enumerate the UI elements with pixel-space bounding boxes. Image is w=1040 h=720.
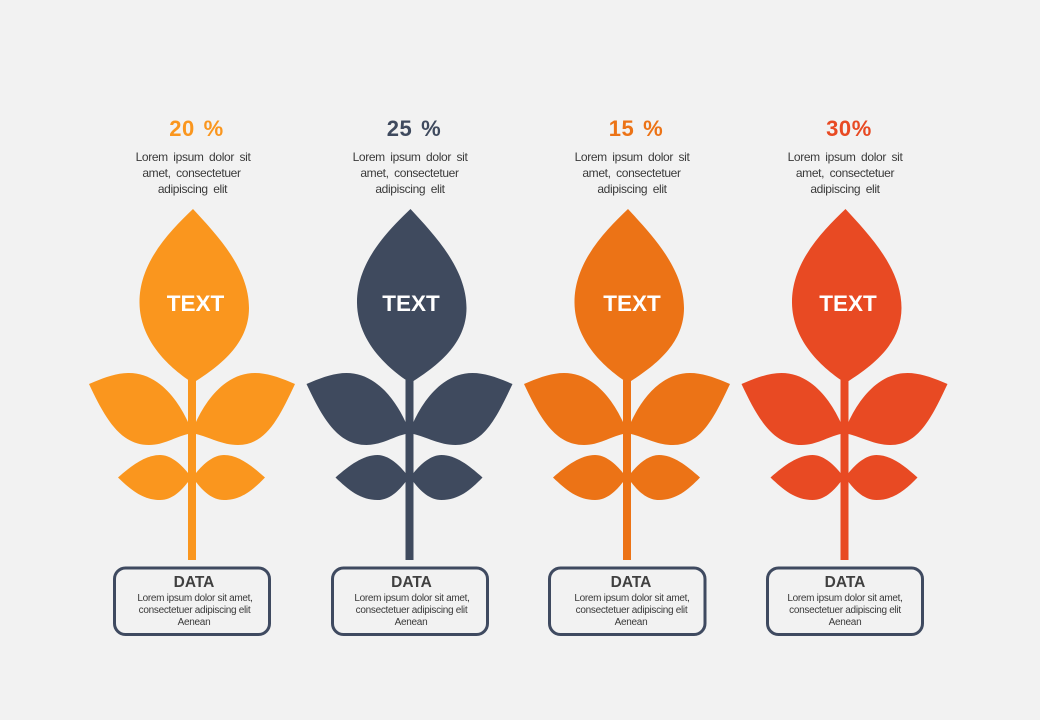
panel: column 2 <box>306 116 512 634</box>
leaf label 1: TEXT <box>167 291 225 316</box>
data box 3: DATA <box>611 574 651 591</box>
panel: column 4 <box>742 116 948 634</box>
description text 4: Lorem ipsum dolor sit <box>788 150 902 164</box>
data box 3: consectetuer adipiscing elit <box>576 605 688 616</box>
data box 2: Lorem ipsum dolor sit amet, <box>354 593 470 604</box>
leaf label 4: TEXT <box>819 291 877 316</box>
panel: column 1 <box>89 116 295 634</box>
data box 1: DATA <box>174 574 214 591</box>
leaf label 2: TEXT <box>382 291 440 316</box>
description text 2: adipiscing elit <box>375 182 446 196</box>
data box 2: Aenean <box>395 617 427 628</box>
percentage: 15 %: 15 % <box>609 116 663 141</box>
description text 4: adipiscing elit <box>810 182 881 196</box>
data box 4: consectetuer adipiscing elit <box>789 605 901 616</box>
percentage: 25 %: 25 % <box>387 116 441 141</box>
description text 4: amet, consectetuer <box>796 166 894 180</box>
description text 2: Lorem ipsum dolor sit <box>353 150 467 164</box>
percentage: 30%: 30% <box>826 116 872 141</box>
data box 1: Aenean <box>178 617 210 628</box>
data box 1: consectetuer adipiscing elit <box>139 605 251 616</box>
plant icon 4 <box>742 209 948 560</box>
description text 3: adipiscing elit <box>597 182 668 196</box>
plant icon 3 <box>524 209 730 560</box>
data box 4: DATA <box>825 574 865 591</box>
data box 4: Lorem ipsum dolor sit amet, <box>787 593 903 604</box>
data box 1: Lorem ipsum dolor sit amet, <box>137 593 253 604</box>
data box 3: Aenean <box>615 617 647 628</box>
data box 3: Lorem ipsum dolor sit amet, <box>574 593 690 604</box>
description text 1: adipiscing elit <box>158 182 228 196</box>
description text 1: Lorem ipsum dolor sit <box>136 150 250 164</box>
plant icon 2 <box>306 209 512 560</box>
data box 1 <box>114 568 270 634</box>
description text 2: amet, consectetuer <box>360 166 459 180</box>
panel: column 3 <box>524 116 730 634</box>
data box 2: consectetuer adipiscing elit <box>356 605 468 616</box>
percentage: 20 %: 20 % <box>169 116 224 141</box>
leaf label 3: TEXT <box>603 291 661 316</box>
description text 3: Lorem ipsum dolor sit <box>575 150 689 164</box>
data box 2 <box>332 568 488 634</box>
data box 2: DATA <box>391 574 432 591</box>
data box 4: Aenean <box>829 617 861 628</box>
description text 3: amet, consectetuer <box>582 166 681 180</box>
description text 1: amet, consectetuer <box>142 166 241 180</box>
data box 3 <box>550 568 705 634</box>
plant icon 1 <box>89 209 295 560</box>
data box 4 <box>768 568 922 634</box>
